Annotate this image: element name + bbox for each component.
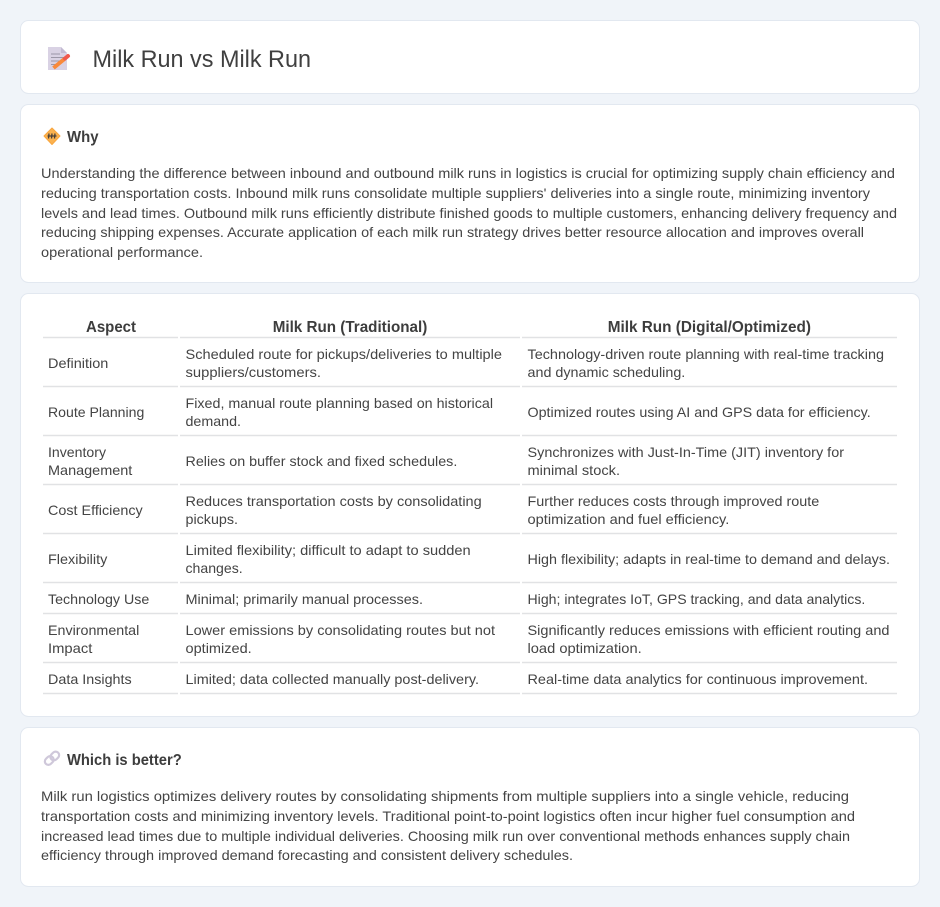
row: environmental impact: Environmental (48, 622, 139, 638)
row: route planning: Fixed, manual route planning based on historical (186, 395, 493, 411)
row: environmental impact: Impact (48, 640, 92, 656)
row: flexibility: changes. (186, 560, 243, 576)
text block: why: reducing transportation costs. Inbound milk runs consolidate multiple suppliers' deliveries into a single route, minimizing inventory (41, 185, 870, 201)
heading: why: Why (67, 129, 99, 146)
row: definition (48, 346, 884, 380)
row: environmental impact: Significantly reduces emissions with efficient routing and (528, 622, 890, 638)
row: flexibility: Flexibility (48, 551, 107, 567)
text block: which is better: Milk run logistics optimizes delivery routes by consolidating shipments from multiple suppliers into a single vehicle, reducing (41, 788, 849, 804)
text block: why: operational performance. (41, 244, 203, 260)
row: technology use: Technology Use (48, 591, 150, 607)
icon: warning diamond (44, 128, 60, 144)
row: route planning: Optimized routes using AI and GPS data for efficiency. (528, 404, 871, 420)
icon: document with pencil (48, 47, 68, 70)
text block: which is better (41, 788, 855, 863)
table header: Milk Run (Traditional) (273, 319, 427, 336)
row: environmental impact (48, 622, 890, 656)
text block: why: reducing shipping expenses. Accurate application of each milk run strategy drives better resource allocation and improves overall (41, 224, 864, 240)
title: Milk Run vs Milk Run (92, 46, 311, 73)
text block: which is better: transportation costs and minimizing inventory levels. Traditional point-to-point logistics often incur higher fuel consumption and (41, 808, 855, 824)
table header: Aspect (86, 319, 137, 336)
row: environmental impact: load optimization. (528, 640, 642, 656)
row: technology use: High; integrates IoT, GPS tracking, and data analytics. (528, 591, 865, 607)
row: route planning: demand. (186, 413, 241, 429)
panel: which is better (20, 728, 920, 886)
text block: why (41, 165, 897, 260)
row: cost efficiency: Further reduces costs through improved route (528, 493, 820, 509)
row: environmental impact: optimized. (186, 640, 252, 656)
row: inventory management (48, 444, 844, 478)
icon: chain link (43, 750, 61, 766)
table header: Milk Run (Digital/Optimized) (608, 319, 811, 336)
heading: which is better: Which is better? (67, 752, 182, 769)
row: inventory management: Relies on buffer stock and fixed schedules. (186, 453, 457, 469)
row: flexibility (48, 542, 890, 576)
row: data insights (48, 671, 868, 687)
row: cost efficiency: optimization and fuel efficiency. (528, 511, 729, 527)
row: inventory management: Management (48, 462, 132, 478)
text block: why: levels and lead times. Outbound milk runs efficiently distribute finished goods to multiple customers, enhancing delivery frequency and (41, 205, 897, 221)
row: definition: suppliers/customers. (186, 364, 321, 380)
row: inventory management: Inventory (48, 444, 106, 460)
text block: which is better: efficiency through improved demand forecasting and consistent delivery schedules. (41, 847, 573, 863)
row: definition: and dynamic scheduling. (528, 364, 685, 380)
row: flexibility: Limited flexibility; difficult to adapt to sudden (186, 542, 471, 558)
row: definition: Scheduled route for pickups/deliveries to multiple (186, 346, 502, 362)
row: cost efficiency: Reduces transportation costs by consolidating (186, 493, 482, 509)
panel: comparison table (20, 294, 920, 716)
row: cost efficiency: Cost Efficiency (48, 502, 143, 518)
panel: header (20, 20, 920, 94)
table header (86, 319, 811, 336)
row: data insights: Data Insights (48, 671, 132, 687)
row: data insights: Limited; data collected manually post-delivery. (186, 671, 479, 687)
row: inventory management: minimal stock. (528, 462, 620, 478)
row: flexibility: High flexibility; adapts in real-time to demand and delays. (528, 551, 890, 567)
text block: why: Understanding the difference between inbound and outbound milk runs in logistics is crucial for optimizing supply chain efficiency and (41, 165, 895, 181)
text block: which is better: increased lead times due to multiple individual deliveries. Choosing milk run over conventional methods enhances supply chain (41, 828, 850, 844)
panel: why (20, 104, 920, 282)
row: route planning: Route Planning (48, 404, 144, 420)
row: route planning (48, 395, 871, 429)
row: cost efficiency: pickups. (186, 511, 238, 527)
row: data insights: Real-time data analytics for continuous improvement. (528, 671, 868, 687)
row: definition: Technology-driven route planning with real-time tracking (528, 346, 884, 362)
row: technology use (48, 591, 865, 607)
row: inventory management: Synchronizes with Just-In-Time (JIT) inventory for (528, 444, 844, 460)
row: environmental impact: Lower emissions by consolidating routes but not (186, 622, 495, 638)
row: definition: Definition (48, 355, 108, 371)
row: technology use: Minimal; primarily manual processes. (186, 591, 423, 607)
row: cost efficiency (48, 493, 820, 527)
